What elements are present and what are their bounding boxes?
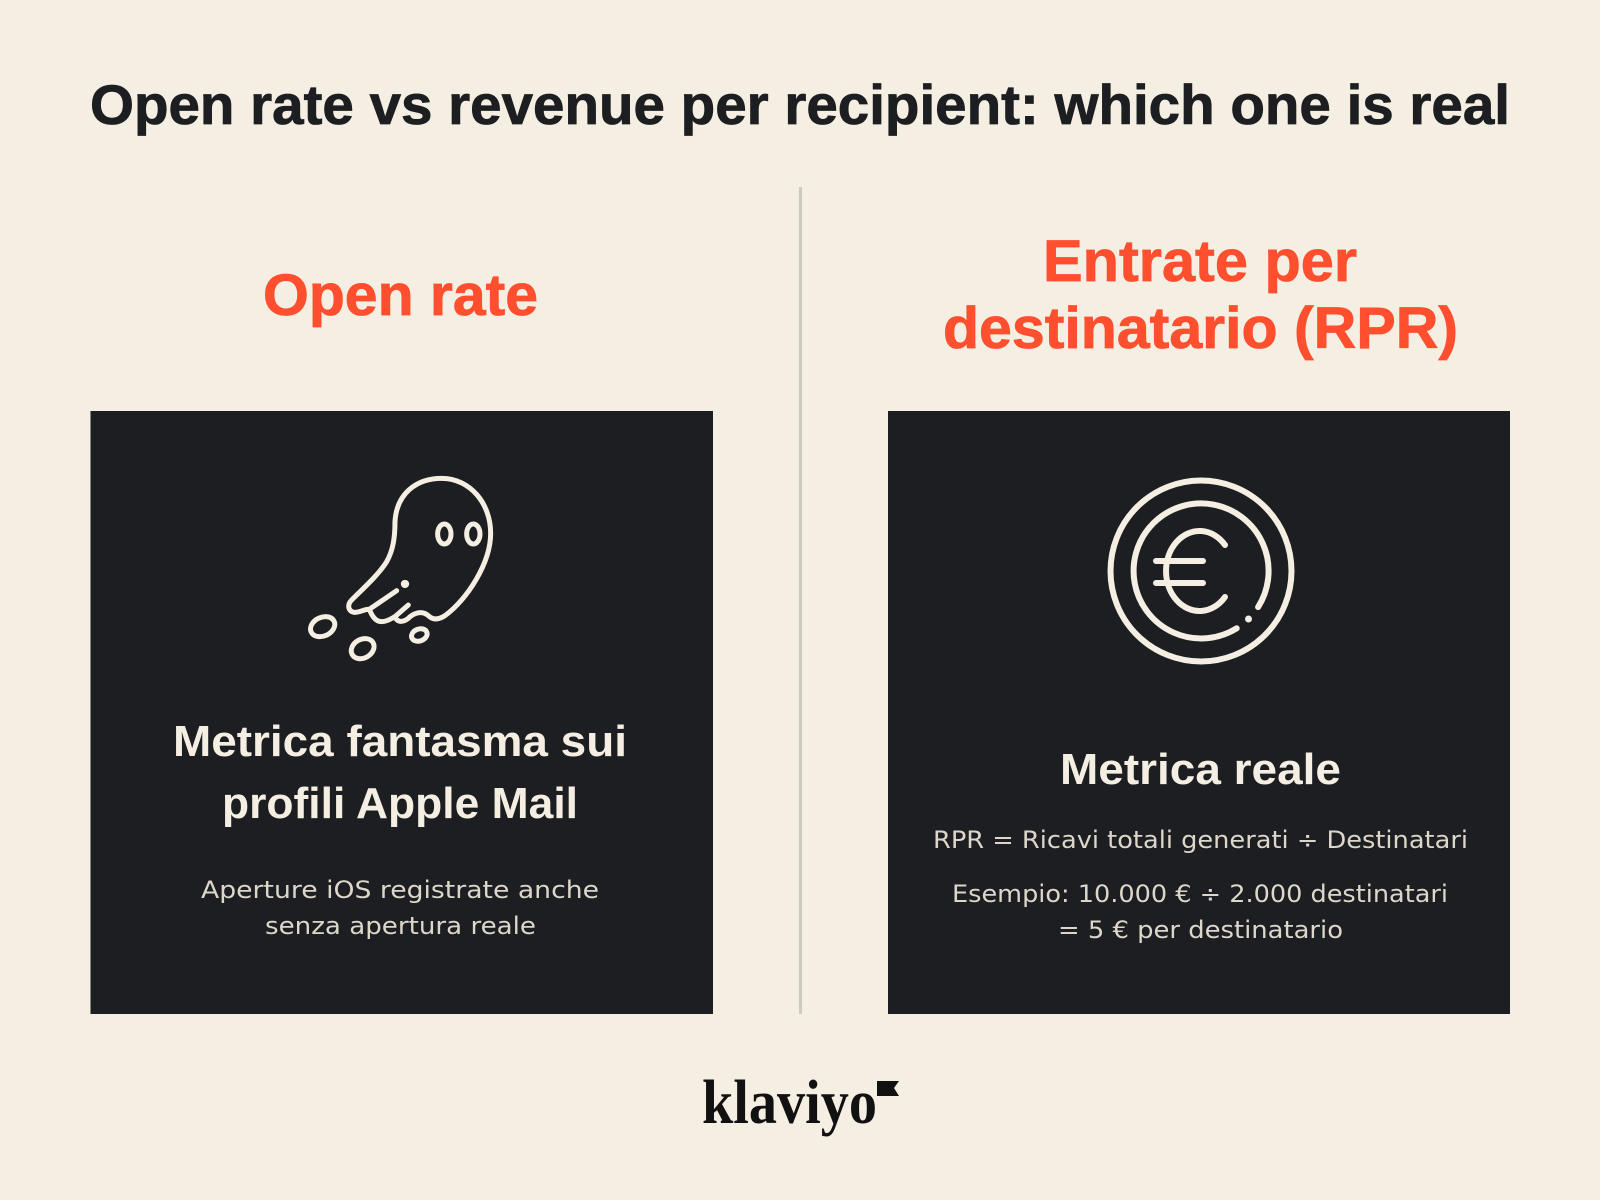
- panel body text: senza apertura reale: [265, 912, 536, 940]
- panel heading: profili Apple Mail: [222, 779, 578, 828]
- logo: klaviyo: klaviyo: [702, 1069, 877, 1137]
- panel body text: Aperture iOS registrate anche: [201, 876, 599, 904]
- panel body text: [201, 876, 599, 940]
- panel heading: Metrica reale: [1060, 745, 1341, 794]
- example: [952, 880, 1448, 944]
- heading: open rate: Open rate: [263, 263, 538, 328]
- panel heading: Metrica fantasma sui: [173, 717, 627, 766]
- formula: RPR = Ricavi totali generati ÷ Destinatari: [933, 826, 1468, 854]
- heading: entrate per destinatario: [943, 229, 1458, 361]
- heading: entrate per destinatario: destinatario (RPR): [943, 296, 1458, 361]
- panel heading: [173, 717, 627, 828]
- icon: euro coin: [1110, 480, 1292, 662]
- icon: ghost: [307, 478, 491, 663]
- heading: entrate per destinatario: Entrate per: [1043, 229, 1357, 294]
- example: = 5 € per destinatario: [1058, 916, 1343, 944]
- title: Open rate vs revenue per recipient: which one is real: [90, 73, 1510, 136]
- example: Esempio: 10.000 € ÷ 2.000 destinatari: [952, 880, 1448, 908]
- panel: open rate: [90, 411, 713, 1014]
- panel: RPR: [888, 411, 1510, 1014]
